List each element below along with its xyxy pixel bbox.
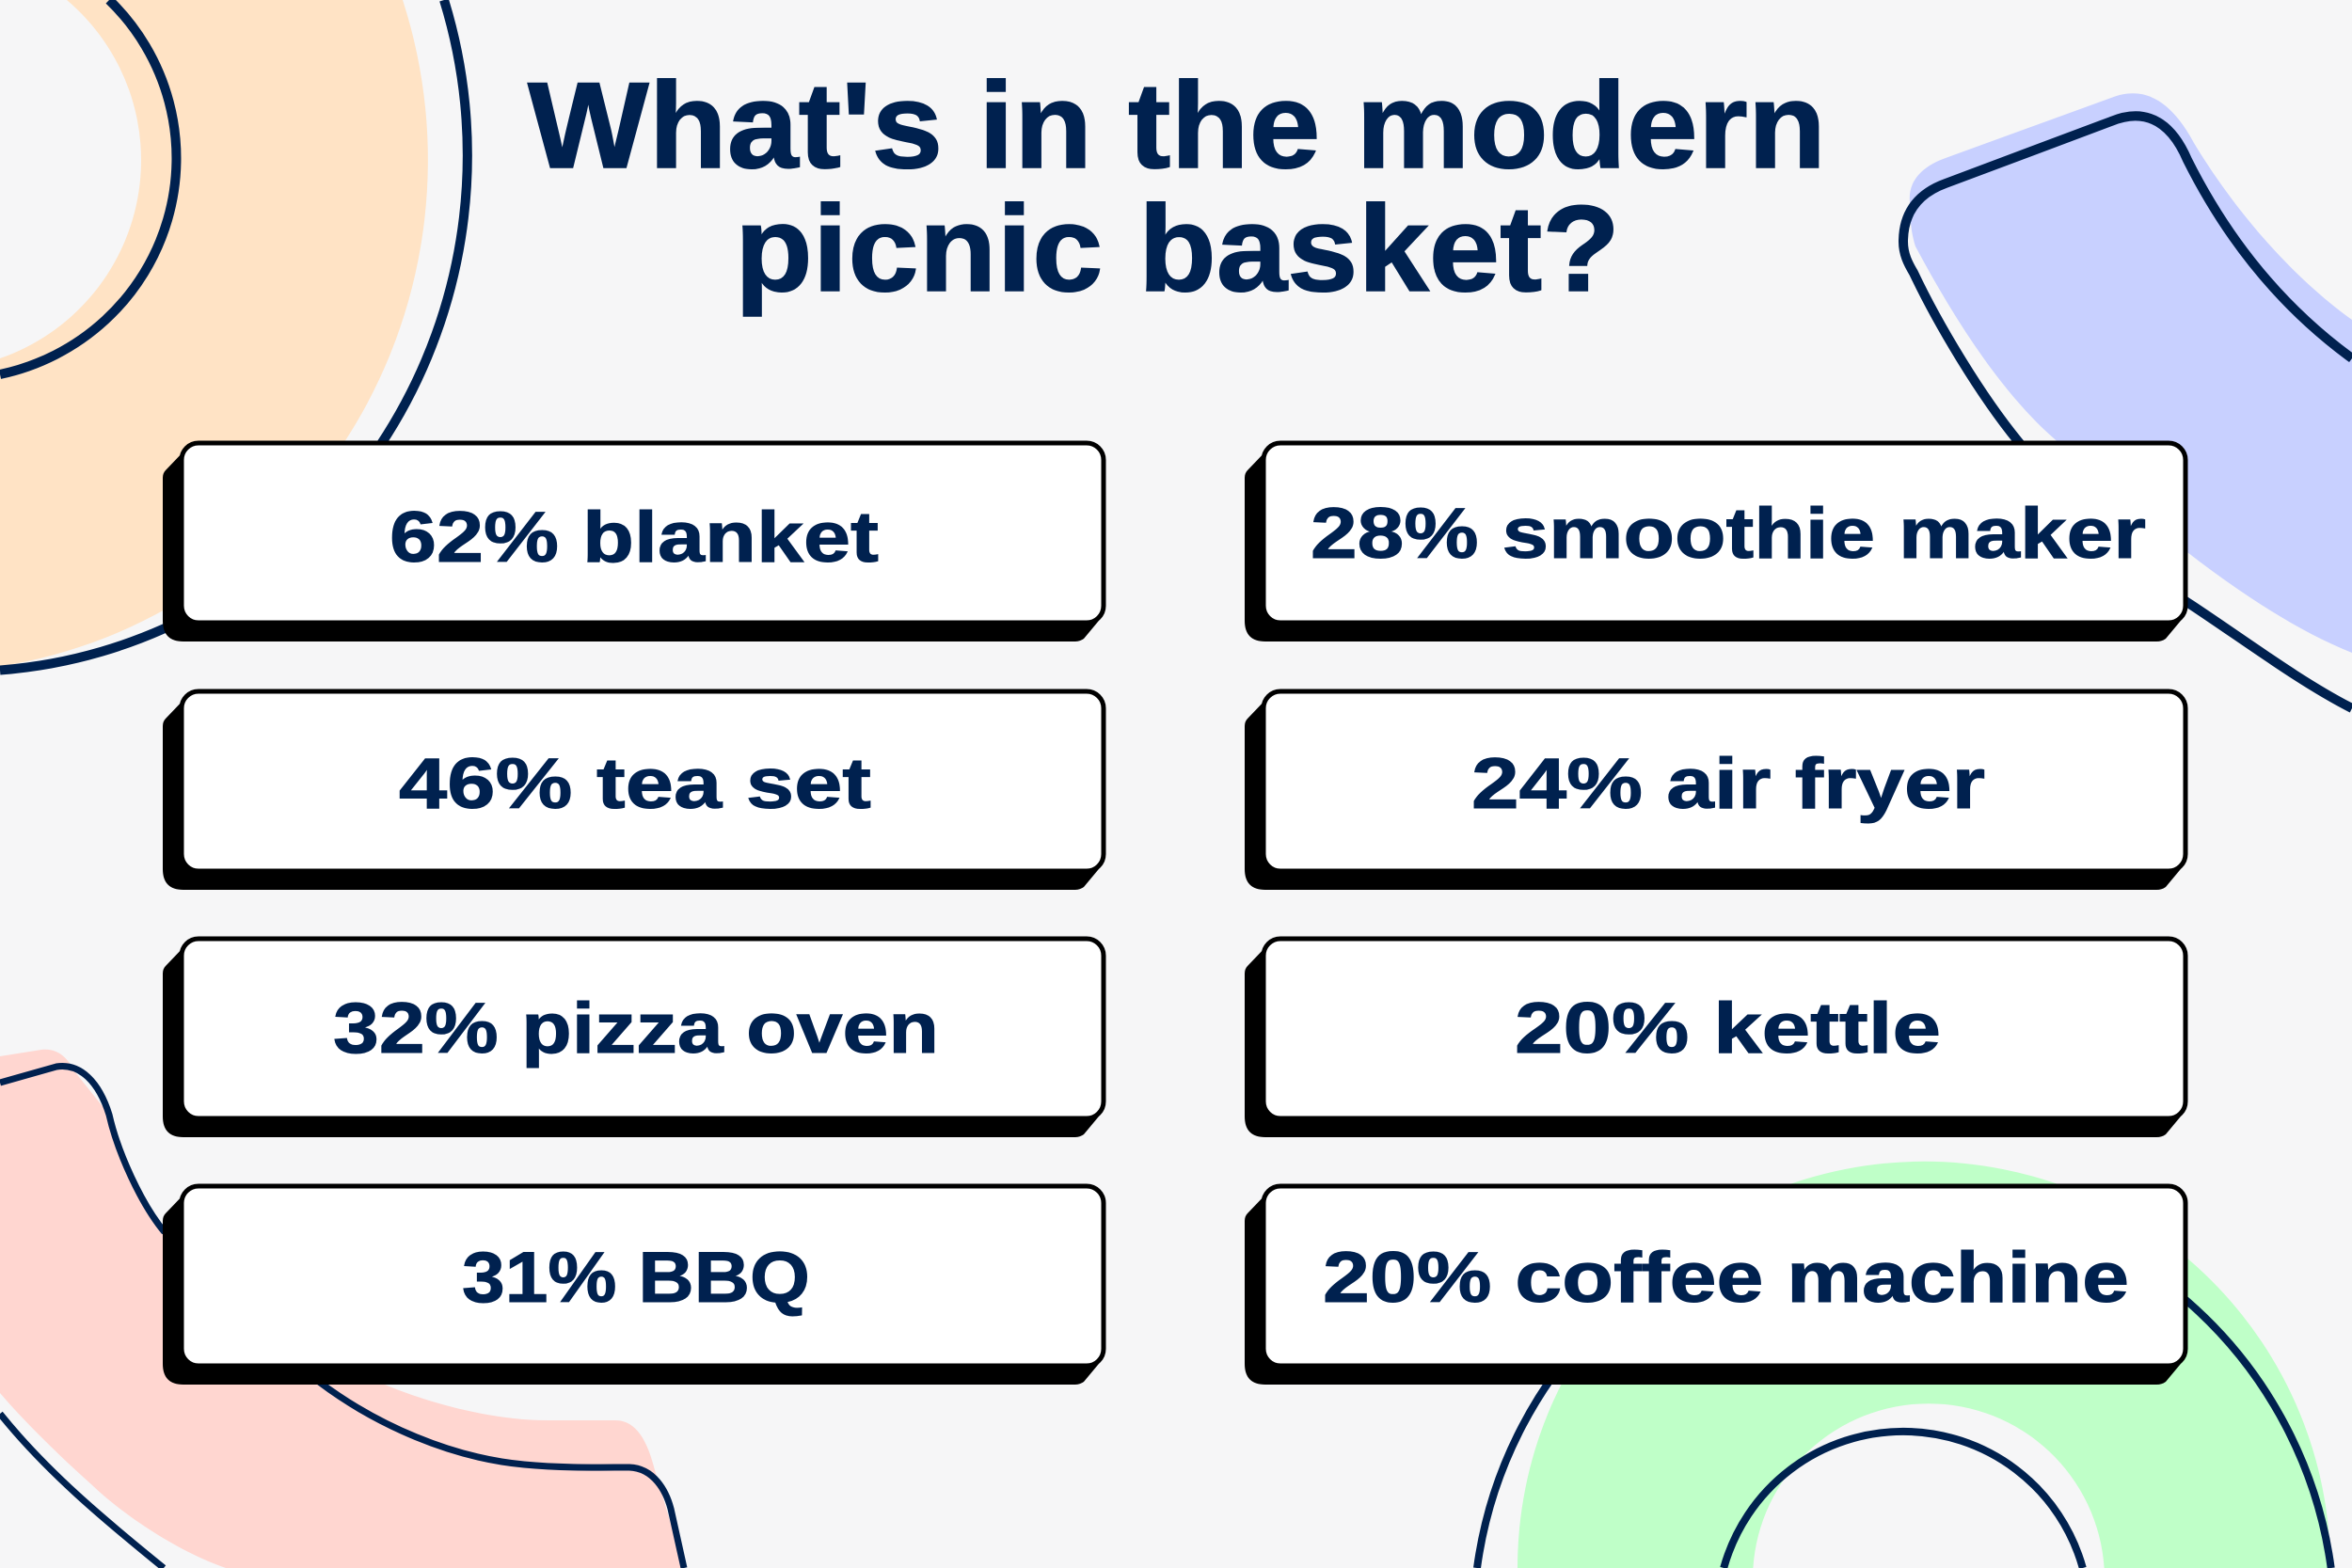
card: 46% tea set: 46% tea set bbox=[399, 744, 871, 824]
card: 28% smoothie maker: 28% smoothie maker bbox=[1311, 494, 2146, 574]
card: 20% coffee machine: 20% coffee machine bbox=[1323, 1238, 2129, 1318]
title: picnic basket? bbox=[735, 180, 1620, 317]
card: 31% BBQ: 31% BBQ bbox=[462, 1238, 810, 1318]
decoration: lavender arc top right bbox=[1903, 93, 2352, 708]
decoration: green ring bottom right bbox=[1477, 1162, 2331, 1568]
card: 31% BBQ bbox=[163, 1186, 1104, 1385]
card: 28% smoothie maker bbox=[1245, 443, 2185, 641]
card: 24% air fryer bbox=[1245, 691, 2185, 890]
card: 32% pizza oven bbox=[163, 939, 1104, 1137]
card: 62% blanket bbox=[163, 443, 1104, 641]
card: 20% kettle: 20% kettle bbox=[1515, 989, 1941, 1069]
title bbox=[528, 56, 1826, 317]
card: 24% air fryer: 24% air fryer bbox=[1471, 744, 1985, 824]
title: What's in the modern bbox=[528, 56, 1826, 194]
decoration: orange ring top left bbox=[0, 0, 468, 670]
card: 62% blanket: 62% blanket bbox=[389, 498, 879, 578]
card: 32% pizza oven: 32% pizza oven bbox=[333, 989, 939, 1069]
card: 20% coffee machine bbox=[1245, 1186, 2185, 1385]
card: 20% kettle bbox=[1245, 939, 2185, 1137]
decoration: pink arc bottom left bbox=[0, 1050, 684, 1568]
card: 46% tea set bbox=[163, 691, 1104, 890]
